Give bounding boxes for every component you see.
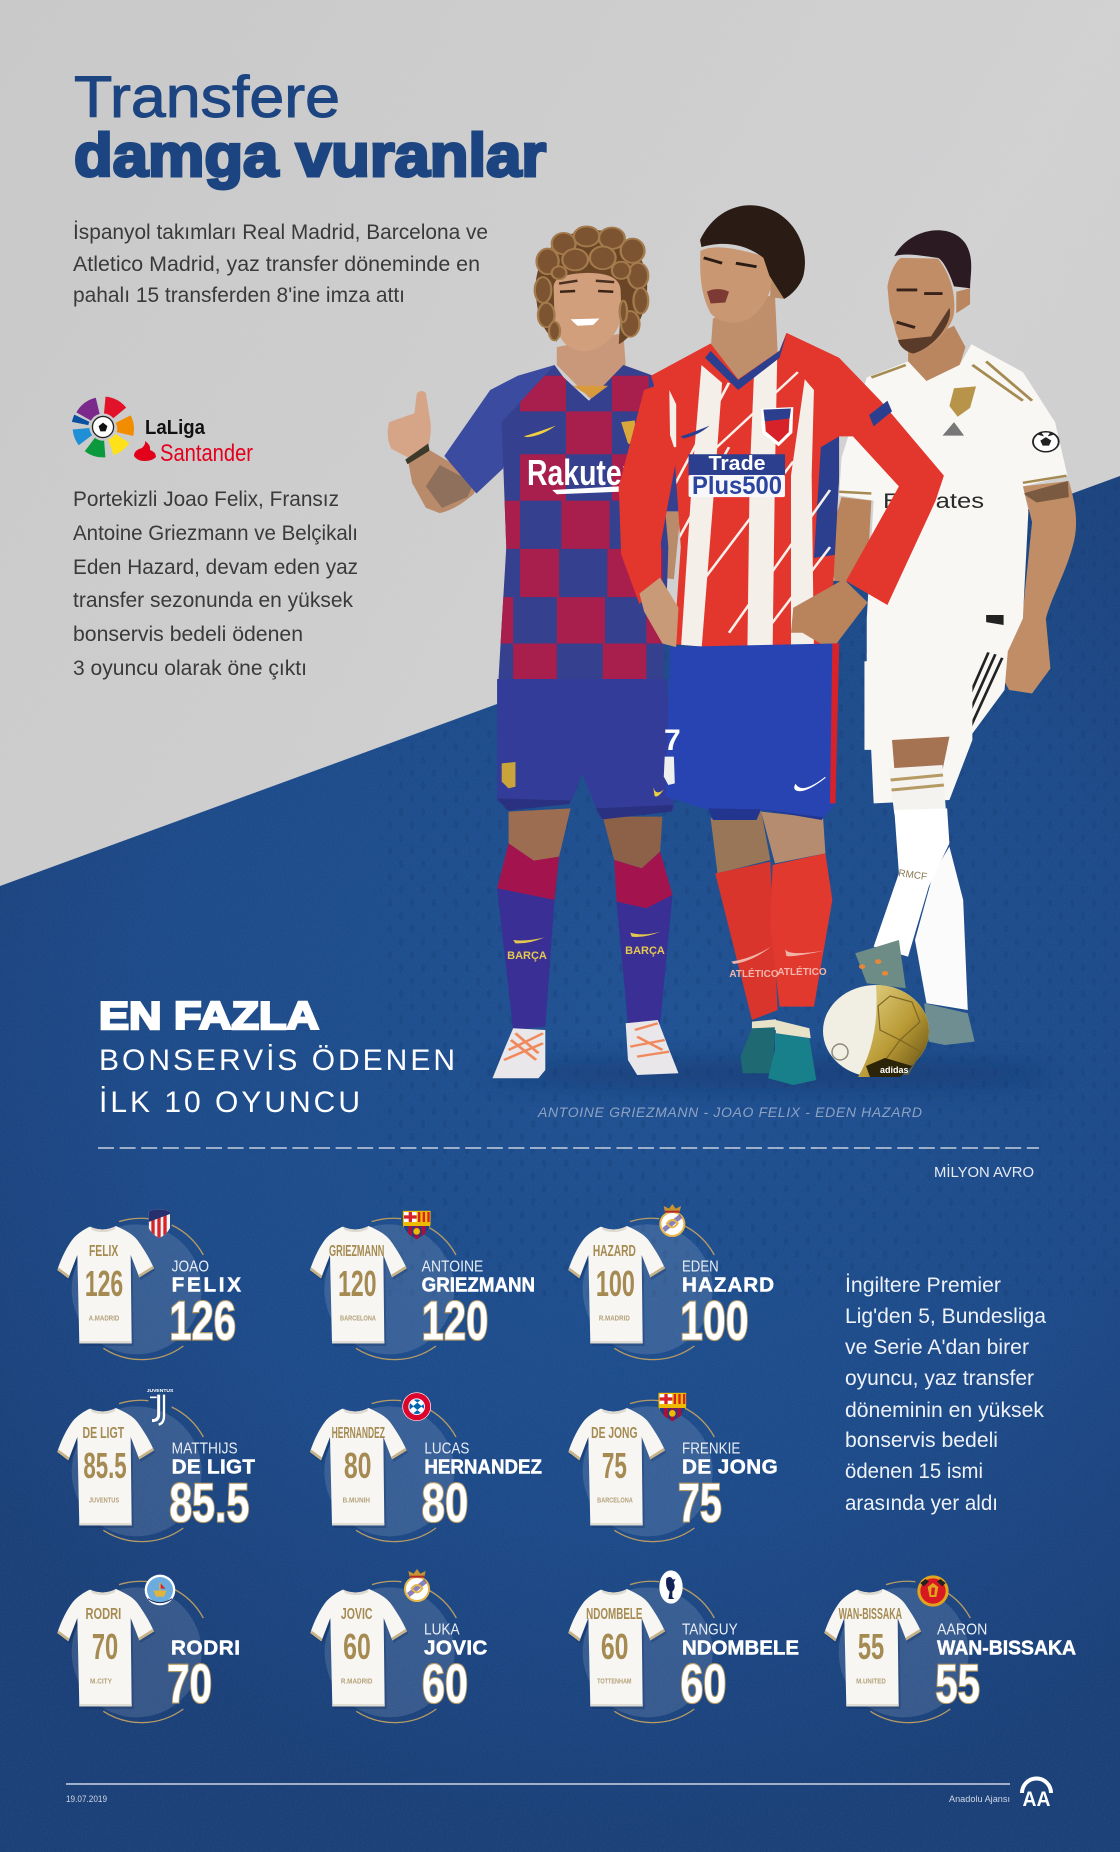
player: Joao Felix: Plus500 bbox=[692, 472, 782, 500]
sponsor text on Hazard shirt: Emirates bbox=[883, 490, 984, 513]
name and value: ANTOINE bbox=[422, 1259, 483, 1276]
side paragraph: Premier League note: ve Serie A'dan birer bbox=[845, 1335, 1029, 1359]
heading line 1: EN FAZLA bbox=[99, 995, 319, 1038]
heading: top 10 players bbox=[99, 995, 455, 1119]
name and value: 60 bbox=[422, 1653, 468, 1714]
shirt text: GRIEZMANN bbox=[329, 1243, 384, 1260]
player card: Eden Hazard bbox=[568, 1204, 774, 1360]
name and value bbox=[169, 1259, 241, 1351]
shirt text: WAN-BISSAKA bbox=[839, 1606, 902, 1623]
icon: Manchester United crest bbox=[917, 1575, 949, 1607]
shirt text bbox=[591, 1425, 637, 1505]
side paragraph: Premier League note: arasında yer aldı bbox=[845, 1491, 998, 1515]
shirt text: TOTTENHAM bbox=[597, 1677, 631, 1686]
shirt text: RODRI bbox=[85, 1606, 121, 1623]
name and value: 70 bbox=[167, 1653, 212, 1714]
name and value: HERNANDEZ bbox=[424, 1456, 542, 1479]
shirt text bbox=[85, 1606, 121, 1686]
heading line 3: İLK 10 OYUNCU bbox=[99, 1086, 360, 1119]
icon: Santander flame bbox=[134, 441, 156, 461]
icon: Tottenham crest bbox=[659, 1570, 683, 1604]
name and value bbox=[167, 1637, 240, 1714]
name and value: HAZARD bbox=[682, 1274, 774, 1297]
name and value: TANGUY bbox=[682, 1622, 738, 1639]
name and value: DE LIGT bbox=[172, 1456, 255, 1479]
icon: Atletico crest bbox=[149, 1208, 170, 1238]
logo: LaLiga Santander bbox=[80, 405, 253, 467]
shirt text: 75 bbox=[602, 1445, 627, 1486]
player: Joao Felix: ATLÉTICO bbox=[777, 965, 827, 978]
paragraph: top three players: Eden Hazard, devam eden yaz bbox=[73, 555, 358, 579]
shirt text bbox=[82, 1425, 127, 1505]
ground shadow under players bbox=[485, 1060, 1055, 1088]
paragraph: top three players: Antoine Griezmann ve Belçikalı bbox=[73, 521, 358, 545]
name and value: JOVIC bbox=[424, 1637, 487, 1660]
name and value: 80 bbox=[422, 1472, 468, 1533]
name and value bbox=[422, 1441, 542, 1533]
shirt text bbox=[85, 1243, 123, 1323]
shorts number: 7 bbox=[664, 724, 681, 757]
ball brand text: adidas bbox=[880, 1065, 909, 1075]
name and value: JOAO bbox=[172, 1259, 209, 1276]
player card: Frenkie de Jong bbox=[568, 1393, 778, 1542]
Santander wordmark: Santander bbox=[160, 440, 253, 467]
player: Antoine Griezmann: BARÇA bbox=[625, 945, 665, 957]
player card: Joao Felix bbox=[57, 1208, 241, 1360]
side paragraph: Premier League note: bonservis bedeli bbox=[845, 1428, 998, 1452]
player card: Luka Jovic bbox=[310, 1569, 487, 1723]
player card: Tanguy Ndombele bbox=[568, 1570, 799, 1723]
shirt text bbox=[839, 1606, 902, 1686]
unit label: MİLYON AVRO bbox=[934, 1163, 1034, 1181]
player: Joao Felix bbox=[619, 205, 944, 1085]
shirt text bbox=[329, 1243, 384, 1323]
name and value: FRENKIE bbox=[682, 1441, 740, 1458]
date: 19.07.2019 bbox=[66, 1794, 107, 1805]
shirt text: 60 bbox=[601, 1626, 628, 1667]
icon: Real Madrid crest bbox=[405, 1569, 429, 1601]
name and value: RODRI bbox=[171, 1637, 240, 1660]
sponsor text on Felix shirt: Trade bbox=[708, 453, 766, 475]
name and value: GRIEZMANN bbox=[422, 1274, 535, 1297]
shirt text: 55 bbox=[858, 1626, 884, 1667]
name and value bbox=[422, 1622, 487, 1714]
player card: Aaron Wan-Bissaka bbox=[824, 1575, 1076, 1723]
name and value bbox=[680, 1622, 799, 1714]
name and value: NDOMBELE bbox=[682, 1637, 799, 1660]
icon: Real Madrid crest bbox=[660, 1204, 684, 1236]
player card: Rodri bbox=[57, 1575, 240, 1723]
sock text: ATLÉTICO bbox=[729, 967, 779, 980]
shirt text: R.MADRID bbox=[599, 1314, 630, 1323]
icon: Barcelona crest bbox=[403, 1211, 431, 1241]
name and value: 85.5 bbox=[169, 1472, 249, 1533]
title line 2: damga vuranlar bbox=[74, 122, 546, 189]
icon: Juventus crest bbox=[147, 1388, 174, 1425]
name and value: 100 bbox=[680, 1290, 749, 1351]
shirt text: B.MUNIH bbox=[343, 1496, 370, 1505]
side paragraph: Premier League note: İngiltere Premier bbox=[845, 1273, 1001, 1297]
shirt text: M.CITY bbox=[90, 1677, 112, 1686]
name and value: 126 bbox=[169, 1290, 236, 1351]
name and value: 60 bbox=[680, 1653, 726, 1714]
shirt text: NDOMBELE bbox=[586, 1606, 642, 1623]
shirt text bbox=[341, 1606, 372, 1686]
title bbox=[74, 65, 546, 189]
name and value bbox=[935, 1622, 1076, 1714]
source: Anadolu Ajansı bbox=[949, 1794, 1010, 1805]
shirt text: JUVENTUS bbox=[89, 1496, 119, 1505]
intro paragraph: İspanyol takımları Real Madrid, Barcelona ve bbox=[73, 220, 488, 244]
sock text: BARÇA bbox=[507, 950, 547, 962]
shirt text bbox=[586, 1606, 642, 1686]
photo caption: ANTOINE GRIEZMANN - JOAO FELIX - EDEN HAZARD bbox=[537, 1104, 922, 1120]
name and value: EDEN bbox=[682, 1259, 719, 1276]
name and value: 75 bbox=[678, 1472, 722, 1533]
paragraph: top three players: bonservis bedeli ödenen bbox=[73, 622, 303, 646]
shirt text: M.UNITED bbox=[856, 1677, 886, 1686]
shirt text: BARCELONA bbox=[340, 1314, 377, 1323]
icon: Bayern crest bbox=[402, 1392, 431, 1421]
shirt text bbox=[332, 1425, 385, 1505]
name and value: DE JONG bbox=[682, 1456, 778, 1479]
heading line 2: BONSERVİS ÖDENEN bbox=[99, 1044, 455, 1077]
shirt text: HERNANDEZ bbox=[332, 1425, 385, 1442]
name and value: LUCAS bbox=[424, 1441, 469, 1458]
name and value: AARON bbox=[937, 1622, 987, 1639]
icon: AA logo bbox=[1022, 1778, 1051, 1811]
background: diagonal blue lower area bbox=[0, 476, 1120, 1852]
player: Eden Hazard bbox=[828, 230, 1076, 1045]
name and value bbox=[678, 1441, 778, 1533]
intro paragraph: pahalı 15 transferden 8'ine imza attı bbox=[73, 283, 405, 307]
football bbox=[823, 985, 929, 1077]
intro paragraph bbox=[73, 220, 488, 307]
shirt text: JOVIC bbox=[341, 1606, 372, 1623]
shirt text: DE LIGT bbox=[82, 1425, 125, 1442]
name and value bbox=[422, 1259, 535, 1351]
shirt text: A.MADRID bbox=[89, 1314, 119, 1323]
shirt text: FELIX bbox=[89, 1243, 119, 1260]
footer bbox=[66, 1778, 1051, 1811]
side paragraph: Premier League note: Lig'den 5, Bundesliga bbox=[845, 1304, 1046, 1328]
sock text: RMCF bbox=[898, 868, 928, 883]
name and value: 55 bbox=[935, 1653, 980, 1714]
intro paragraph: Atletico Madrid, yaz transfer döneminde en bbox=[73, 252, 480, 276]
paragraph: top three players bbox=[73, 487, 358, 680]
sponsor text on Griezmann shirt: Rakuten bbox=[527, 452, 639, 493]
paragraph: top three players: 3 oyuncu olarak öne çıktı bbox=[73, 656, 307, 680]
shirt text: DE JONG bbox=[591, 1425, 637, 1442]
name and value: LUKA bbox=[424, 1622, 460, 1639]
shirt text bbox=[593, 1243, 636, 1323]
LaLiga wordmark: LaLiga bbox=[145, 417, 206, 439]
icon: LaLiga colour wheel bbox=[80, 405, 126, 449]
player: Antoine Griezmann bbox=[388, 226, 683, 1078]
side paragraph: Premier League note: ödenen 15 ismi bbox=[845, 1459, 983, 1483]
name and value: WAN-BISSAKA bbox=[937, 1637, 1076, 1660]
name and value: MATTHIJS bbox=[172, 1441, 238, 1458]
icon: Manchester City crest bbox=[145, 1575, 175, 1605]
side paragraph: Premier League note: oyuncu, yaz transfer bbox=[845, 1366, 1034, 1390]
paragraph: top three players: Portekizli Joao Felix, Fransız bbox=[73, 487, 339, 511]
shirt text: 60 bbox=[343, 1626, 371, 1667]
shirt text: 100 bbox=[596, 1263, 635, 1304]
name and value bbox=[680, 1259, 774, 1351]
name and value: 120 bbox=[422, 1290, 488, 1351]
player card: Matthijs de Ligt bbox=[57, 1388, 255, 1542]
icon: Barcelona crest bbox=[658, 1393, 686, 1423]
title line 1: Transfere bbox=[74, 65, 340, 130]
name and value: FELIX bbox=[172, 1274, 241, 1297]
shirt text: R.MADRID bbox=[341, 1677, 372, 1686]
paragraph: top three players: transfer sezonunda en yüksek bbox=[73, 588, 353, 612]
shirt text: 126 bbox=[85, 1263, 123, 1304]
shirt text: 85.5 bbox=[83, 1445, 127, 1486]
player card: Antoine Griezmann bbox=[310, 1211, 535, 1360]
name and value bbox=[169, 1441, 255, 1533]
side paragraph: Premier League note bbox=[845, 1273, 1046, 1515]
shirt text: 80 bbox=[344, 1445, 372, 1486]
shirt text: HAZARD bbox=[593, 1243, 636, 1260]
player card: Lucas Hernandez bbox=[310, 1392, 542, 1542]
side paragraph: Premier League note: döneminin en yüksek bbox=[845, 1398, 1044, 1422]
shirt text: 120 bbox=[338, 1263, 377, 1304]
shirt text: BARCELONA bbox=[597, 1496, 633, 1505]
icon: AA logo: AA bbox=[1022, 1788, 1050, 1811]
shirt text: 70 bbox=[92, 1626, 118, 1667]
